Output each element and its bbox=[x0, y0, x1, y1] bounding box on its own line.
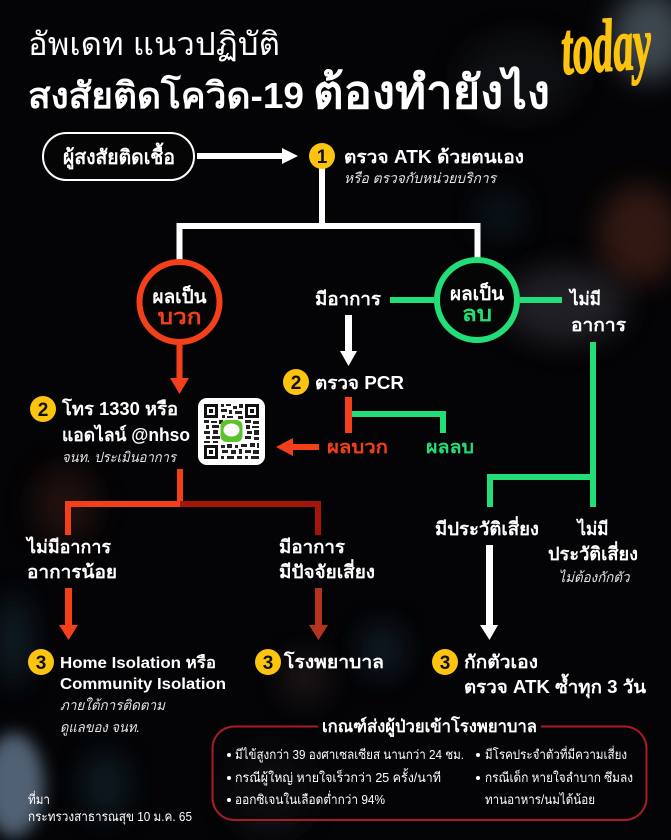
start pill: suspected case bbox=[43, 133, 194, 180]
step 1 badge bbox=[309, 143, 335, 169]
hospital text: โรงพยาบาล bbox=[283, 651, 384, 672]
green connectors beside negative circle bbox=[390, 297, 562, 303]
criteria right column: ทานอาหาร/นมได้น้อย bbox=[485, 792, 595, 807]
arrow: to home isolation bbox=[59, 588, 78, 640]
step 2 badge: PCR: 2 bbox=[291, 373, 301, 394]
quarantine text bbox=[464, 652, 647, 699]
arrow: to hospital bbox=[309, 588, 328, 640]
call text: แอดไลน์ @nhso bbox=[62, 424, 190, 445]
negative result circle: ผลเป็น bbox=[450, 281, 504, 305]
step 1 text: หรือ ตรวจกับหน่วยบริการ bbox=[344, 170, 497, 186]
label: no symptoms bbox=[568, 288, 626, 335]
criteria right column: กรณีเด็ก หายใจลำบาก ซึมลง bbox=[485, 768, 633, 785]
call text: โทร 1330 หรือ bbox=[61, 398, 178, 419]
isolation text bbox=[60, 654, 226, 736]
step 3 badge: hospital bbox=[255, 649, 281, 675]
source: กระทรวงสาธารณสุข 10 ม.ค. 65 bbox=[28, 809, 192, 825]
label: mild symptoms bbox=[25, 536, 117, 582]
source: ที่มา bbox=[28, 791, 50, 807]
step 3 badge: quarantine bbox=[432, 649, 458, 675]
connector: ATK to results bbox=[180, 165, 478, 262]
PCR positive and negative labels bbox=[327, 437, 474, 457]
PCR positive and negative labels: ผลลบ bbox=[426, 437, 474, 457]
step 2 badge: call: 2 bbox=[38, 400, 48, 421]
PCR positive and negative labels: ผลบวก bbox=[327, 437, 388, 457]
step 2 badge: call bbox=[30, 396, 56, 422]
step 3 badge: isolation bbox=[28, 649, 54, 675]
negative result circle bbox=[437, 260, 517, 340]
arrow: positive to call bbox=[170, 345, 189, 394]
arrow: positive PCR to QR bbox=[276, 438, 319, 456]
quarantine text: กักตัวเอง bbox=[464, 652, 538, 672]
step 3 badge: isolation: 3 bbox=[36, 653, 46, 674]
label: symptoms with risk factors: มีอาการ bbox=[279, 537, 345, 557]
isolation text: Community Isolation bbox=[60, 676, 226, 693]
isolation text: ภายใต้การติดตาม bbox=[60, 697, 166, 713]
criteria right column bbox=[476, 746, 633, 807]
label: no symptoms: ไม่มี bbox=[568, 288, 601, 309]
positive result circle bbox=[140, 262, 220, 342]
label: has risk history: มีประวัติเสี่ยง bbox=[435, 516, 539, 539]
title bbox=[28, 26, 550, 118]
arrow: to self quarantine bbox=[480, 545, 498, 640]
title: สงสัยติดโควิด-19 bbox=[28, 74, 304, 116]
call text bbox=[61, 398, 190, 465]
PCR text: ตรวจ PCR bbox=[315, 373, 404, 393]
call text: จนท. ประเมินอาการ bbox=[62, 449, 177, 465]
green branch: no symptoms bbox=[490, 342, 593, 507]
QR code with LINE icon bbox=[198, 398, 265, 465]
quarantine text: ตรวจ ATK ซ้ำทุก 3 วัน bbox=[464, 673, 647, 699]
criteria right column: มีโรคประจำตัวที่มีความเสี่ยง bbox=[485, 746, 627, 762]
criteria left column: มีไข้สูงกว่า 39 องศาเซลเซียส นานกว่า 24 ชม. bbox=[235, 747, 464, 763]
isolation text: ดูแลของ จนท. bbox=[60, 719, 140, 736]
label: symptoms with risk factors: มีปัจจัยเสี่ยง bbox=[279, 559, 375, 582]
negative result circle: ลบ bbox=[462, 303, 492, 326]
label: symptoms with risk factors bbox=[279, 537, 375, 582]
label: mild symptoms: ไม่มีอาการ bbox=[25, 536, 111, 557]
logo: today: today bbox=[558, 1, 654, 91]
label: no risk history: ไม่มี bbox=[576, 518, 608, 539]
positive result circle: บวก bbox=[158, 306, 202, 329]
label: no symptoms: อาการ bbox=[571, 315, 626, 335]
red branch after assessment bbox=[68, 469, 318, 535]
arrow: to step 1 bbox=[197, 148, 298, 164]
source bbox=[28, 791, 192, 825]
start pill: suspected case: ผู้สงสัยติดเชื้อ bbox=[63, 142, 175, 171]
panel heading: เกณฑ์ส่งผู้ป่วยเข้าโรงพยาบาล bbox=[322, 716, 537, 738]
step 1 text: ตรวจ ATK ด้วยตนเอง bbox=[344, 147, 524, 167]
PCR result branches bbox=[345, 397, 443, 433]
panel: hospital referral criteria bbox=[212, 716, 646, 820]
step 3 badge: quarantine: 3 bbox=[440, 653, 450, 674]
label: no risk history bbox=[548, 518, 638, 585]
step 2 badge: PCR bbox=[283, 369, 309, 395]
criteria left column: กรณีผู้ใหญ่ หายใจเร็วกว่า 25 ครั้ง/นาที bbox=[235, 768, 441, 786]
arrow: symptoms to PCR bbox=[340, 315, 357, 366]
label: no risk history: ไม่ต้องกักตัว bbox=[558, 569, 631, 585]
label: no risk history: ประวัติเสี่ยง bbox=[548, 541, 638, 564]
label: mild symptoms: อาการน้อย bbox=[27, 562, 117, 582]
criteria left column: ออกซิเจนในเลือดต่ำกว่า 94% bbox=[235, 791, 385, 807]
criteria left column bbox=[227, 747, 464, 807]
step 3 badge: hospital: 3 bbox=[263, 653, 273, 674]
title: ต้องทำยังไง bbox=[313, 66, 550, 118]
isolation text: Home Isolation หรือ bbox=[60, 654, 216, 672]
label: has symptoms: มีอาการ bbox=[315, 289, 381, 309]
title: อัพเดท แนวปฏิบัติ bbox=[28, 26, 280, 62]
step 1 badge: 1 bbox=[317, 147, 328, 168]
step 1 text bbox=[344, 147, 524, 186]
positive result circle: ผลเป็น bbox=[152, 284, 207, 308]
